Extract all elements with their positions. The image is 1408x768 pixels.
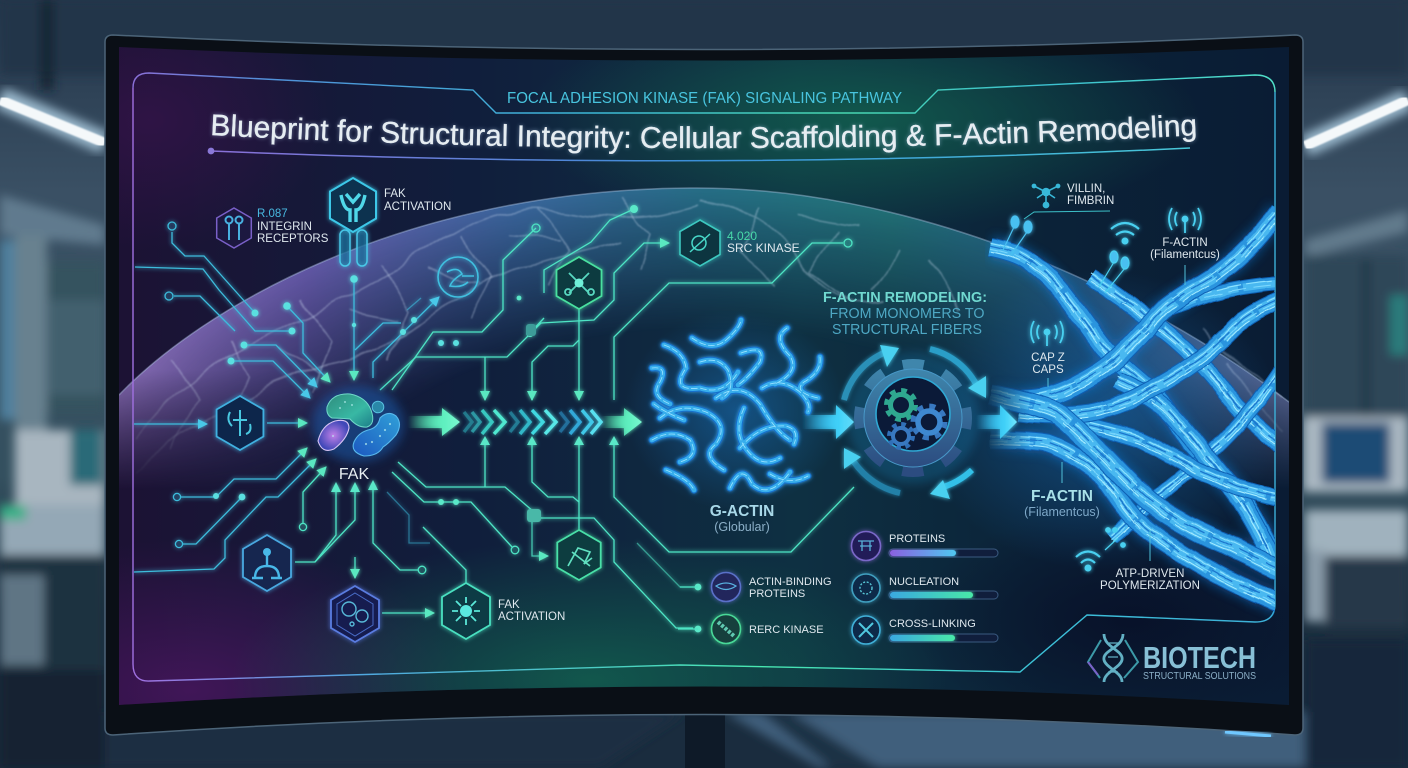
node: FAK activation bottom — [442, 583, 565, 639]
label: FAK activation top — [384, 188, 451, 213]
node: integrin receptors: RECEPTORS — [257, 233, 329, 245]
label: FAK activation top: FAK — [384, 188, 406, 200]
node: integrin receptors: R.087 — [257, 208, 288, 220]
arrow into gear — [802, 405, 854, 439]
FAK protein complex — [312, 386, 404, 483]
node: SRC kinase: SRC KINASE — [727, 241, 800, 255]
green signal lines and branches — [295, 205, 854, 632]
callout: villin, fimbrin: FIMBRIN — [1067, 195, 1114, 207]
label: G-actin: (Globular) — [714, 520, 770, 534]
callout: F-actin filamentous upper: F-ACTIN — [1162, 237, 1208, 249]
label: G-actin: G-ACTIN — [710, 503, 774, 520]
screen — [119, 40, 1289, 720]
subtitle: FOCAL ADHESION KINASE (FAK) SIGNALING PATHWAY — [507, 90, 902, 107]
icon: signal wifi with pins — [1099, 223, 1139, 293]
small gear blue lower — [890, 424, 912, 448]
legend: RERC kinase — [712, 614, 824, 644]
callout: villin, fimbrin — [1003, 183, 1114, 255]
node: bottom hexagon — [331, 586, 379, 642]
legend: actin-binding proteins: PROTEINS — [749, 588, 805, 600]
legend bar: proteins — [852, 532, 998, 560]
callout: ATP-driven polymerization: ATP-DRIVEN — [1116, 568, 1184, 580]
node: green hexagon lower — [557, 530, 601, 580]
node: lower-left hexagon — [243, 535, 291, 591]
callout: villin, fimbrin: VILLIN, — [1067, 183, 1105, 195]
node: integrin receptors — [217, 208, 329, 248]
heading: F-actin remodeling — [823, 289, 987, 338]
node: left hexagon — [217, 396, 263, 450]
heading: F-actin remodeling: F-ACTIN REMODELING: — [823, 289, 987, 306]
label: F-actin filamentous lower — [1024, 462, 1100, 519]
legend bar: cross-linking — [852, 616, 998, 644]
callout: ATP-driven polymerization — [1076, 528, 1200, 592]
small gear blue right — [914, 406, 944, 438]
callout: Cap Z caps — [1031, 321, 1065, 387]
title: Blueprint for Structural Integrity: Cellular Scaffolding & F-Actin Remodeling — [210, 112, 1198, 156]
callout: F-actin filamentous upper — [1150, 208, 1220, 285]
F-actin fibers — [990, 206, 1281, 608]
panel frame outline — [133, 73, 1275, 681]
blue signal lines converging on FAK — [134, 222, 459, 572]
node: SRC kinase — [680, 220, 800, 266]
logo: Biotech Structural Solutions: STRUCTURAL SOLUTIONS — [1143, 671, 1256, 682]
signal cascade arrow band — [408, 408, 642, 436]
legend bar: cross-linking: CROSS-LINKING — [889, 618, 976, 630]
gear assembly with circular arrows — [844, 345, 986, 499]
G-actin monomer squiggles — [652, 320, 820, 490]
legend: actin-binding proteins — [712, 572, 832, 602]
arrow out of gear — [976, 405, 1017, 439]
callout: Cap Z caps: CAP Z — [1031, 352, 1065, 364]
callout: ATP-driven polymerization: POLYMERIZATION — [1100, 580, 1200, 592]
label: F-actin filamentous lower: (Filamentcus) — [1024, 505, 1100, 519]
title underline — [208, 148, 1190, 161]
small gear green — [887, 391, 915, 419]
logo: Biotech Structural Solutions — [1088, 634, 1256, 682]
node: FAK activation bottom: ACTIVATION — [498, 611, 565, 623]
legend: actin-binding proteins: ACTIN-BINDING — [749, 576, 832, 588]
power LED — [1225, 732, 1271, 736]
label: FAK activation top: ACTIVATION — [384, 201, 451, 213]
heading: F-actin remodeling: STRUCTURAL FIBERS — [832, 321, 982, 338]
heading: F-actin remodeling: FROM MONOMERS TO — [830, 305, 984, 322]
callout: F-actin filamentous upper: (Filamentcus) — [1150, 249, 1220, 261]
node: FAK activation receptor — [330, 178, 376, 266]
legend: RERC kinase: RERC KINASE — [749, 624, 824, 636]
node: integrin receptors: INTEGRIN — [257, 221, 312, 233]
FAK protein complex: FAK — [339, 466, 369, 483]
legend bar: nucleation — [852, 574, 998, 602]
label: G-actin — [710, 503, 774, 534]
circular arrows — [844, 349, 978, 493]
monitor bezel — [105, 35, 1303, 735]
cell membrane dome — [119, 188, 1289, 500]
logo: Biotech Structural Solutions: BIOTECH — [1143, 640, 1256, 675]
node: green hexagon upper — [556, 257, 602, 309]
monitor stand — [685, 705, 725, 768]
label: F-actin filamentous lower: F-ACTIN — [1031, 488, 1093, 505]
node: FAK activation bottom: FAK — [498, 599, 520, 611]
icon: circular node — [438, 257, 478, 297]
legend bar: nucleation: NUCLEATION — [889, 576, 959, 588]
node: SRC kinase: 4.020 — [727, 229, 757, 243]
membrane veins — [135, 200, 1285, 470]
callout: Cap Z caps: CAPS — [1032, 364, 1064, 376]
legend bar: proteins: PROTEINS — [889, 533, 945, 545]
